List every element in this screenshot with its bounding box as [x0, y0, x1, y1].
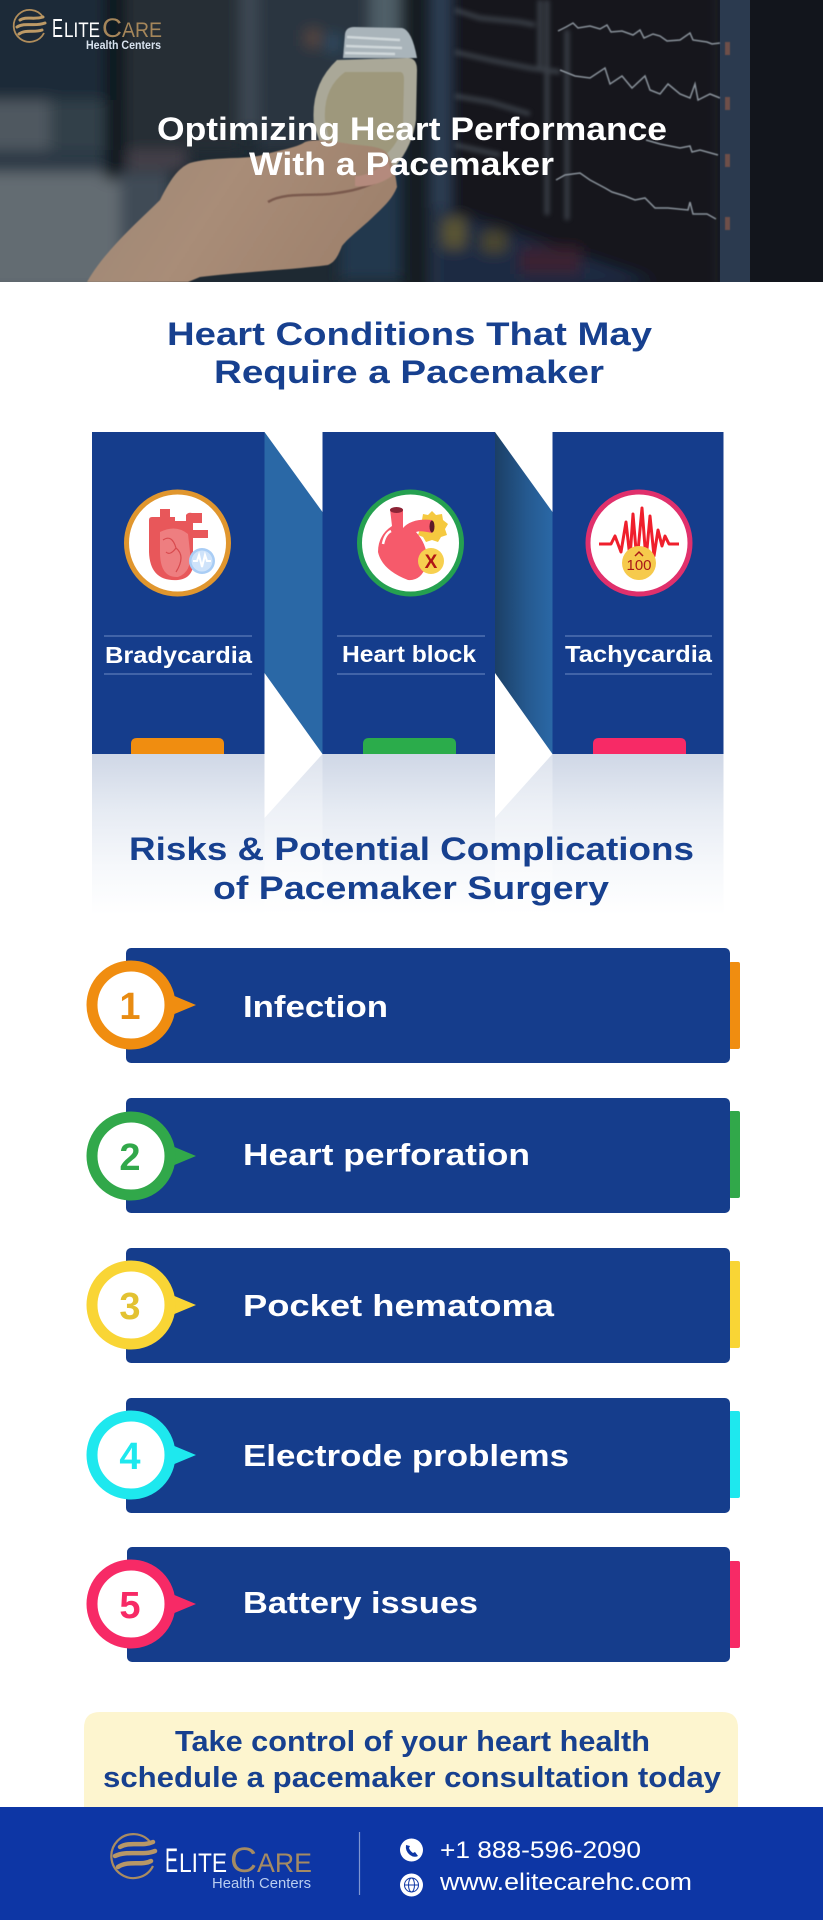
- orange tab: [131, 738, 224, 754]
- icon: rapid heart rate: 100: [626, 557, 652, 574]
- contact: phone: +1 888-596-2090: [440, 1837, 641, 1864]
- green tab: [363, 738, 456, 754]
- logo: top: E: [52, 13, 63, 43]
- list item 4: electrode problems: Electrode problems: [243, 1438, 569, 1473]
- list item 4: electrode problems: 4: [119, 1436, 141, 1478]
- list item 5: battery issues: 5: [119, 1585, 141, 1627]
- heading: heart conditions: [167, 316, 652, 390]
- hand: [87, 140, 397, 282]
- hero title: [157, 111, 667, 182]
- reflection under columns: [92, 754, 724, 915]
- footer band: [0, 1807, 823, 1920]
- list item 1: infection: [92, 948, 740, 1063]
- logo: footer: Health Centers: [212, 1875, 311, 1892]
- list item 1: infection: Infection: [243, 989, 388, 1024]
- list item 3: pocket hematoma: [92, 1248, 740, 1363]
- tachycardia label: Tachycardia: [565, 641, 712, 667]
- list item 2: heart perforation: 2: [119, 1137, 141, 1179]
- logo: footer: LITE: [179, 1848, 227, 1878]
- icon: heart with blocked artery: [360, 492, 462, 594]
- list item 3: pocket hematoma: Pocket hematoma: [243, 1288, 555, 1323]
- icon: anatomical heart: [126, 492, 228, 594]
- heading: risks: of Pacemaker Surgery: [213, 870, 609, 906]
- monitor bezel: [720, 0, 750, 282]
- logo: top: ARE: [122, 19, 162, 42]
- panel: tachycardia: [552, 432, 724, 754]
- logo: top: LITE: [64, 19, 100, 42]
- panel: heart block: [322, 432, 495, 754]
- icon: heart with blocked artery: X: [425, 552, 438, 573]
- call to action box: [84, 1712, 738, 1807]
- heading: heart conditions: Heart Conditions That May: [167, 316, 652, 352]
- call to action box: Take control of your heart health: [175, 1726, 650, 1758]
- connector ribbon 2: [495, 432, 552, 754]
- list item 5: battery issues: [92, 1547, 740, 1662]
- logo: footer: ARE: [257, 1848, 312, 1878]
- hero title: Optimizing Heart Performance: [157, 111, 667, 147]
- logo: footer: C: [230, 1841, 257, 1880]
- panel: bradycardia: [92, 432, 264, 754]
- hero photo banner: [0, 0, 823, 300]
- pink tab: [593, 738, 686, 754]
- pacemaker device: [313, 27, 417, 172]
- logo: top: Health Centers: [86, 38, 161, 52]
- heading: heart conditions: Require a Pacemaker: [214, 354, 604, 390]
- connector ribbon 1: [264, 432, 322, 754]
- logo: footer: E: [165, 1842, 178, 1880]
- list item 1: infection: 1: [119, 986, 141, 1028]
- list item 5: battery issues: Battery issues: [243, 1585, 478, 1620]
- hero title: With a Pacemaker: [249, 146, 554, 182]
- heading: risks: Risks & Potential Complications: [129, 831, 694, 867]
- contact: website: www.elitecarehc.com: [439, 1869, 692, 1896]
- logo: top: C: [102, 13, 122, 43]
- list item 4: electrode problems: [92, 1398, 740, 1513]
- logo: top: [14, 10, 162, 52]
- ECG traces on monitor: [556, 23, 720, 219]
- icon: rapid heart rate: [588, 492, 690, 594]
- list item 2: heart perforation: Heart perforation: [243, 1137, 530, 1172]
- list item 2: heart perforation: [92, 1098, 740, 1213]
- blurred monitor grid: [455, 0, 567, 220]
- red readouts on bezel: [725, 42, 730, 230]
- heading: risks: [129, 831, 694, 906]
- footer divider: [358, 1832, 360, 1895]
- bradycardia label: Bradycardia: [105, 642, 252, 668]
- list item 3: pocket hematoma: 3: [119, 1286, 141, 1328]
- call to action box: schedule a pacemaker consultation today: [103, 1762, 721, 1794]
- logo: footer: [111, 1834, 312, 1892]
- heart block label: Heart block: [342, 641, 476, 667]
